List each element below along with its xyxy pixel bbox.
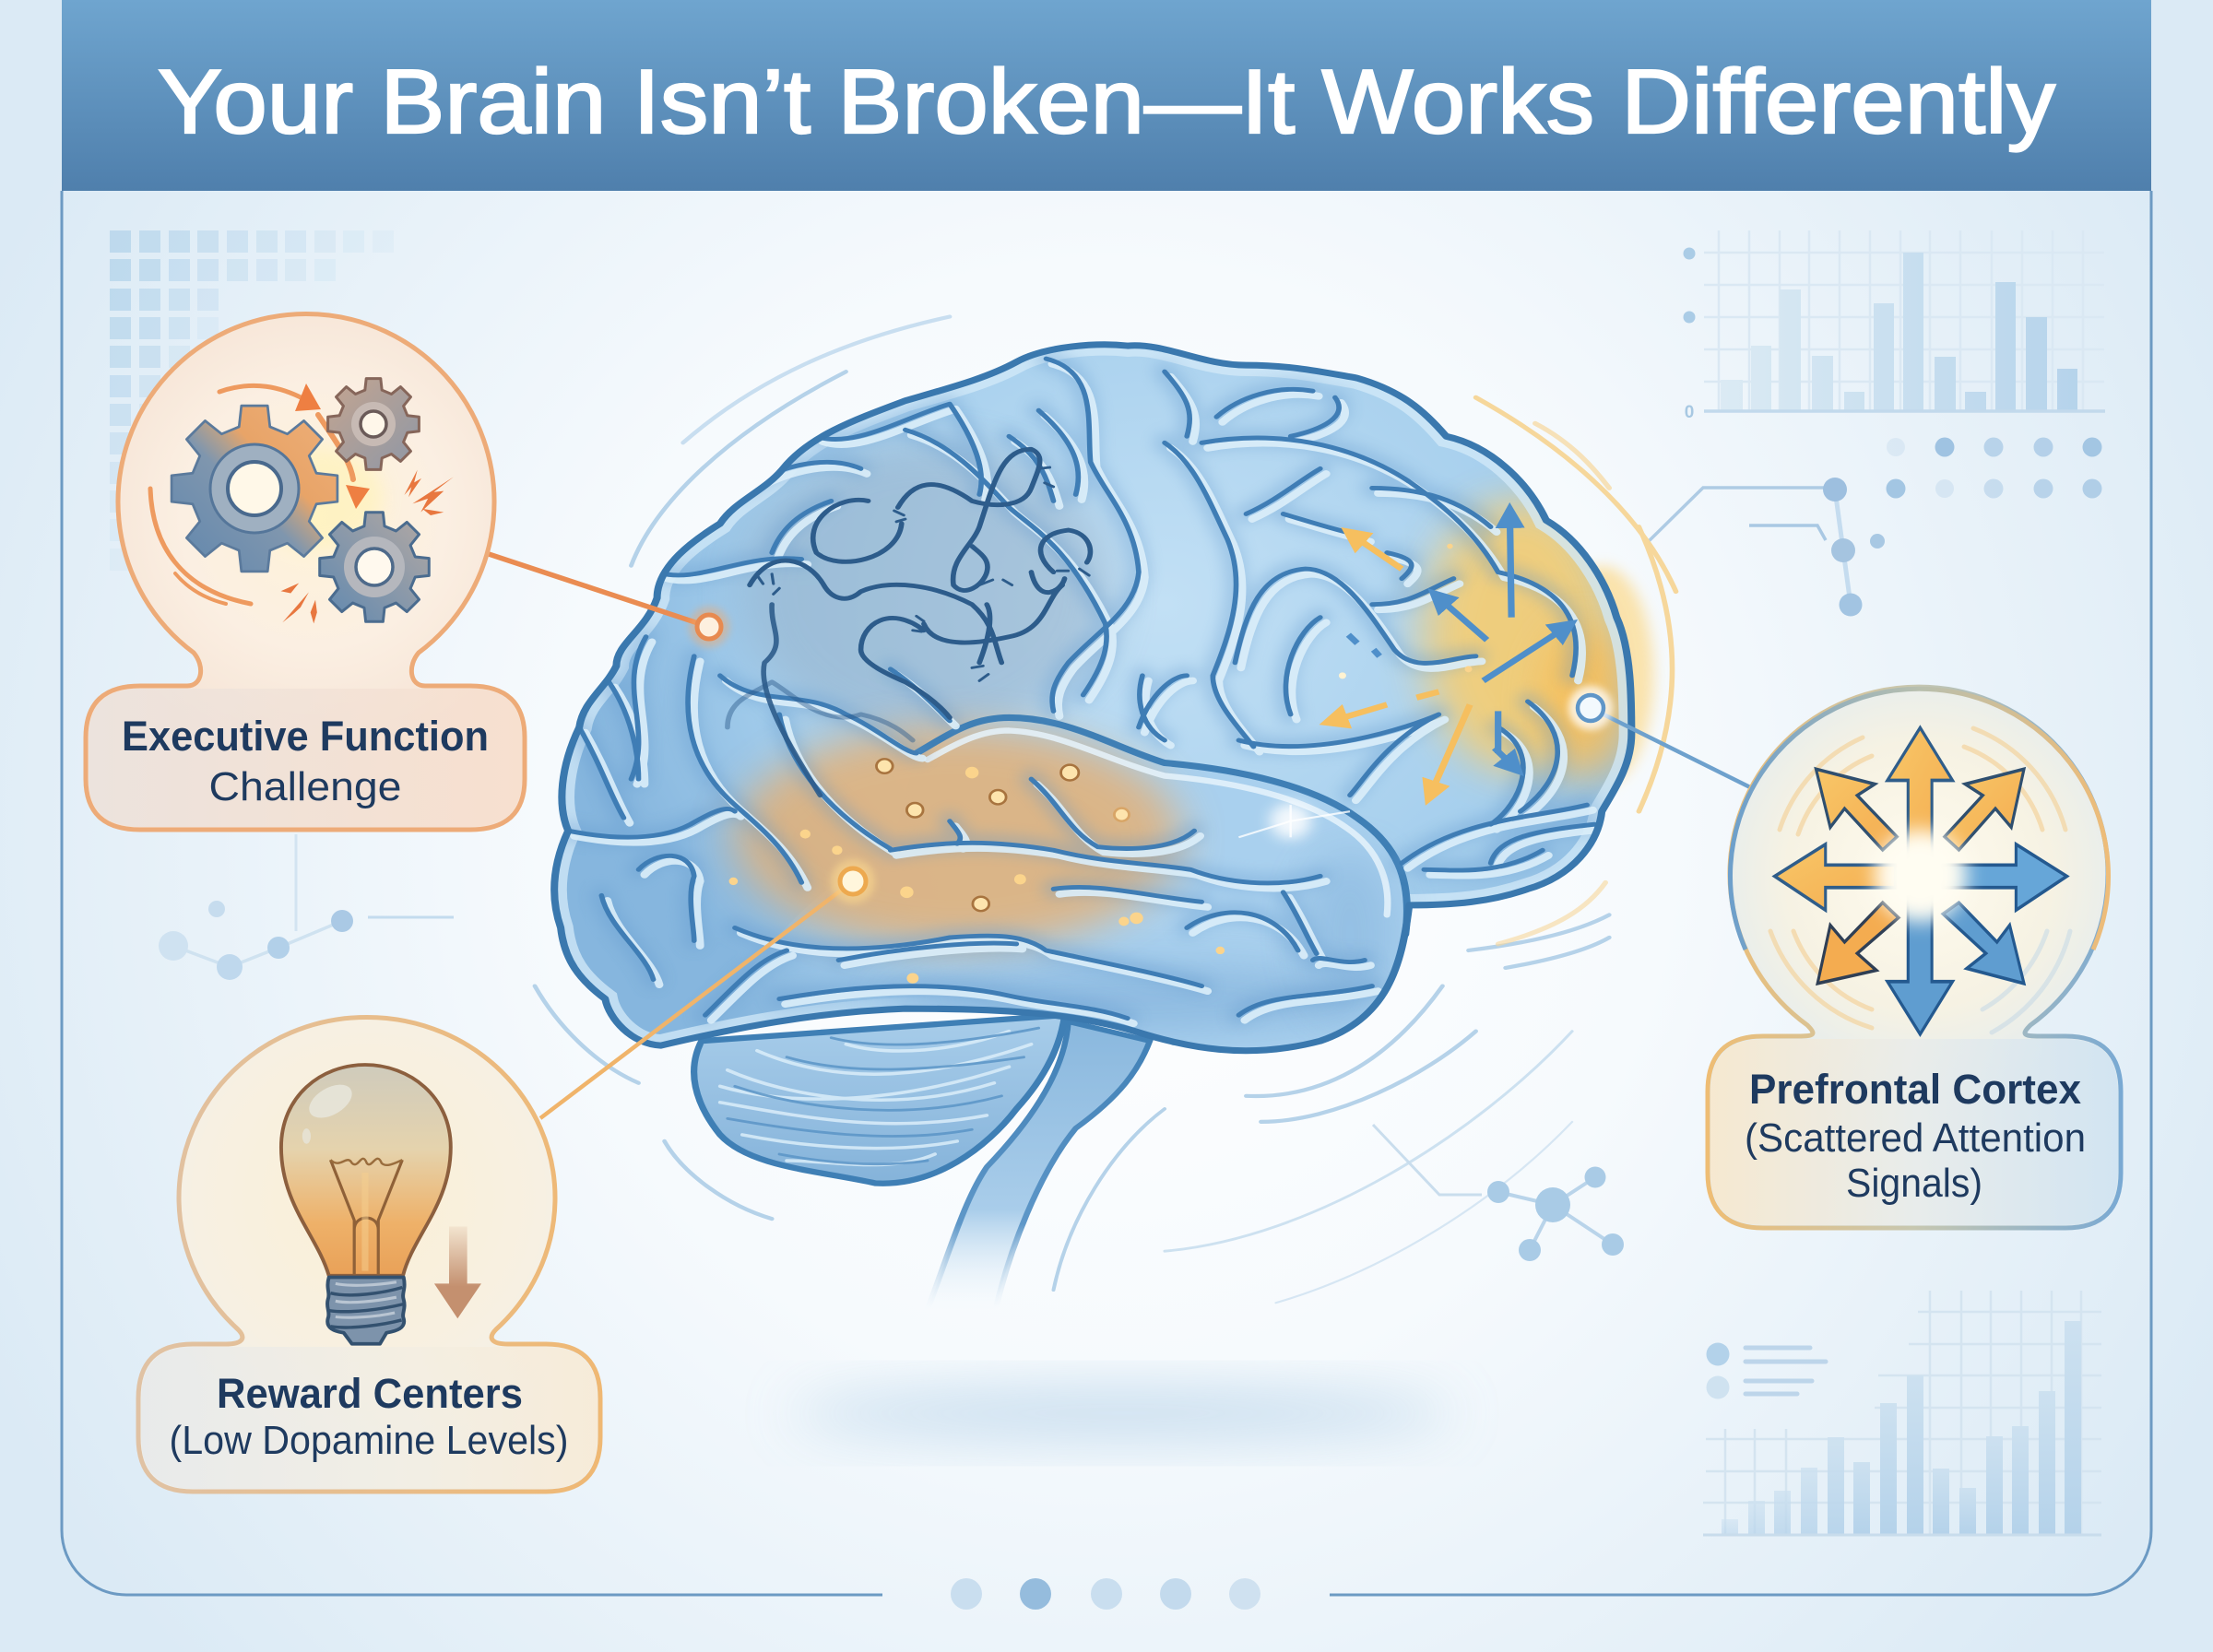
dopamine dots in reward region: [729, 544, 1473, 984]
lower left network nodes: [159, 834, 454, 980]
heading: prefrontal cortex: Prefrontal Cortex: [1749, 1066, 2081, 1113]
top right dot matrix: [1887, 437, 2102, 498]
sulci folds: [568, 359, 1601, 1023]
icon: gears: [150, 379, 454, 623]
connector: prefrontal cortex: [1568, 686, 1752, 788]
callout: prefrontal cortex: [1708, 687, 2121, 1228]
tangled neural wires: [728, 449, 1090, 796]
motion arcs around brain: [535, 317, 1676, 1303]
arrow centre glow: [1875, 830, 1967, 922]
heading: reward centers: Reward Centers: [217, 1370, 523, 1417]
lower right molecule: [1373, 1125, 1624, 1261]
cerebrum outline: [554, 345, 1631, 1051]
brainstem: [928, 1021, 1150, 1309]
subheading: low dopamine levels: (Low Dopamine Levels): [170, 1418, 568, 1463]
floor shadow under brain: [790, 1389, 1454, 1437]
connector: executive function: [486, 553, 729, 647]
callout shape: [86, 314, 525, 830]
top right bar chart: 0: [1685, 403, 1694, 422]
subheading: scattered attention: (Scattered Attention: [1745, 1115, 2086, 1161]
heading: executive function: Executive Function: [122, 713, 489, 760]
callout: executive function: [86, 314, 525, 830]
connector: reward centers: [540, 859, 875, 1118]
icon: scattered arrows: [1775, 727, 2066, 1034]
top right network nodes: [1646, 478, 1885, 616]
lower right bar chart with legend: [1703, 1291, 2101, 1535]
callout: reward centers: [138, 1017, 600, 1492]
subheading: signals: Signals): [1846, 1161, 1982, 1206]
temporal lobe: [713, 717, 1407, 1048]
label background: [141, 1347, 598, 1489]
decorative grid squares top left: [110, 230, 394, 571]
title: Your Brain Isn’t Broken—It Works Differently: [158, 51, 2055, 152]
brain sparkle highlight: [1238, 803, 1350, 839]
label background: [1710, 1039, 2118, 1225]
cerebrum base shape: [554, 345, 1631, 1051]
ripple rings: [1770, 728, 2070, 1032]
cerebellum: [694, 1015, 1065, 1184]
top right bar chart: [1684, 230, 2105, 422]
subheading: challenge: Challenge: [208, 764, 402, 809]
label background: [89, 689, 522, 827]
arrow: low dopamine: [434, 1226, 481, 1318]
header banner: [62, 0, 2151, 191]
callout shape: [138, 1017, 600, 1492]
callout shape: [1708, 687, 2121, 1228]
pagination dots: [951, 1578, 1260, 1610]
illustration: brain: [535, 317, 1676, 1309]
icon: light bulb: [281, 1065, 481, 1344]
amber halo outside prefrontal edge: [1550, 566, 1653, 785]
scattered attention arrows in prefrontal region: [1339, 520, 1561, 789]
upper circle rim tint: [1730, 689, 2108, 950]
regional colour glows and inner rim: [554, 345, 1631, 1051]
